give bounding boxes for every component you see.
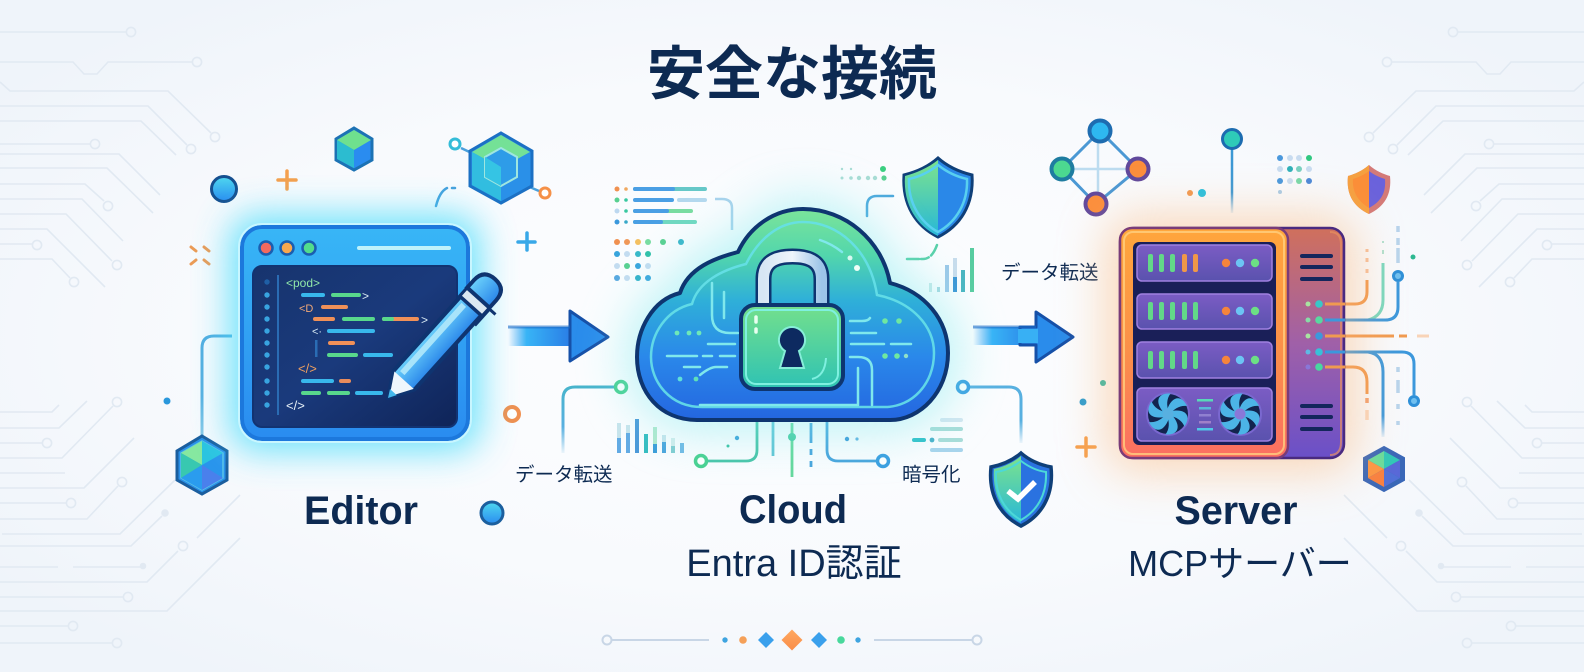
label: entra id: Entra ID認証 (686, 543, 902, 585)
small dots (726, 436, 859, 448)
title bar line (357, 246, 451, 250)
icon: orange shield (1348, 165, 1390, 214)
data lines right (912, 418, 963, 452)
side vents (1300, 254, 1333, 431)
code lines: > (421, 313, 428, 327)
icon: lower left hexagon (177, 436, 227, 494)
rack unit 3 (1137, 342, 1272, 378)
code lines: <pod> (286, 276, 320, 290)
wire: left connector (202, 336, 232, 437)
line numbers (264, 275, 279, 415)
code lines: <· (312, 326, 322, 338)
bar chart left (617, 419, 684, 453)
dot grid (1277, 155, 1312, 194)
arrow: editor to cloud (508, 311, 608, 361)
cloud body (637, 209, 948, 420)
rack (1133, 242, 1276, 445)
circuit traces right (1344, 27, 1584, 648)
title: 安全な接続 (647, 42, 937, 107)
server glow (1106, 216, 1356, 472)
panel: cloud with lock (625, 198, 960, 432)
wires (1325, 226, 1429, 437)
small dots (1080, 189, 1206, 406)
code lines (286, 276, 428, 413)
code screen (253, 266, 457, 427)
label: cloud: Cloud (739, 488, 847, 532)
editor glow (230, 215, 480, 451)
port wire stubs (1325, 304, 1345, 367)
icon: blue ball (212, 176, 236, 202)
label: server: Server (1174, 489, 1298, 533)
port dots (1306, 300, 1323, 371)
cloud inner outline (651, 222, 934, 407)
icon: orange spark (191, 247, 209, 264)
label: editor: Editor (304, 489, 418, 533)
icon: network (1052, 120, 1148, 214)
server front (1120, 228, 1288, 458)
panel: server (1106, 216, 1356, 472)
cloud circuit lines (667, 240, 911, 405)
icon: lower ball (481, 502, 503, 524)
label: data transfer left: データ転送 (515, 464, 613, 486)
label: data transfer right: データ転送 (1001, 262, 1099, 284)
rack unit 2 (1137, 294, 1272, 329)
bracket (715, 199, 732, 230)
arrow: cloud to server (973, 312, 1073, 362)
data list (614, 186, 707, 224)
icon: small hexagon (336, 128, 372, 170)
traffic lights (260, 242, 316, 254)
lock shackle (764, 256, 822, 305)
status dots (840, 166, 887, 181)
fan indicators (1197, 399, 1213, 402)
dot grid (614, 239, 684, 281)
icon: orange plus (1077, 438, 1095, 456)
icon: orange ring (505, 407, 519, 421)
icon: orange plus (278, 171, 296, 189)
icon: check shield (991, 453, 1051, 526)
panel: editor decorations (164, 128, 550, 524)
lock (741, 256, 843, 389)
rack unit 1 (1137, 245, 1272, 281)
shield connector (867, 196, 893, 216)
cloud glow (625, 198, 960, 432)
dot (164, 398, 170, 404)
lock body (741, 305, 843, 389)
wire: lower left (563, 382, 626, 453)
code lines: </> (298, 361, 317, 376)
icon: large hexagon with nodes (450, 133, 550, 203)
lock highlight (754, 317, 758, 332)
keyhole (779, 327, 805, 368)
icon: shield (904, 158, 972, 237)
fan right (1217, 390, 1263, 438)
label: mcp server: MCPサーバー (1128, 543, 1352, 584)
icon: dashed arc (436, 188, 455, 206)
icon: pen (377, 269, 513, 414)
icon: pin (1222, 130, 1242, 213)
mini graph (907, 245, 974, 292)
code lines: <D (299, 303, 313, 315)
code lines: </> (286, 398, 305, 413)
wire: right connector (958, 382, 1021, 443)
cloud dots (675, 256, 908, 381)
fan unit (1137, 388, 1272, 441)
icon: blue plus (518, 233, 535, 250)
panel: cloud decorations (563, 158, 1051, 526)
icon: lower right hexagon (1364, 447, 1404, 491)
code lines: > (362, 289, 369, 303)
panel: server decorations (1052, 120, 1429, 491)
wires under cloud (696, 422, 888, 477)
footer ornament (602, 630, 982, 650)
circuit traces left (0, 27, 240, 648)
window frame (242, 227, 468, 439)
server side panel (1120, 228, 1344, 458)
fan left (1145, 390, 1191, 438)
panel: editor window (230, 215, 513, 451)
label: encryption: 暗号化 (902, 464, 961, 486)
